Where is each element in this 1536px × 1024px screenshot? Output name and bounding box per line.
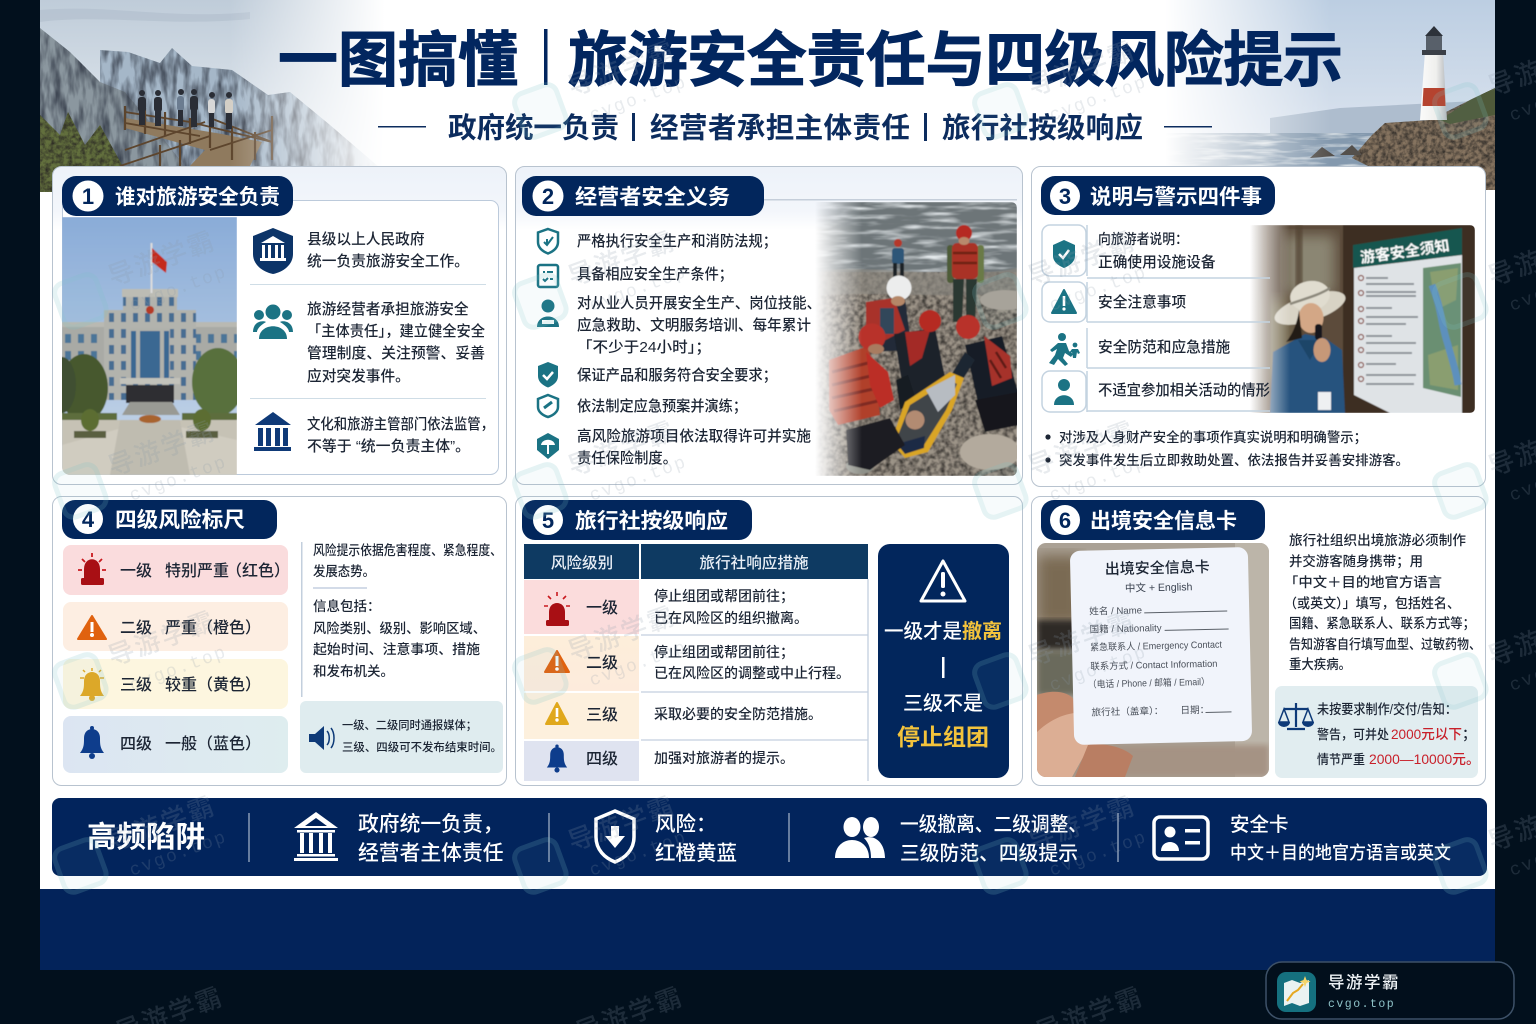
icon: operators group bbox=[253, 304, 293, 339]
panel 6 heading: 出境安全信息卡 bbox=[1090, 509, 1237, 533]
text: card requirements: 并交游客随身携带；用 bbox=[1289, 553, 1423, 570]
text: card requirements: 旅行社组织出境旅游必须制作 bbox=[1289, 532, 1467, 548]
rescuer standing bbox=[947, 225, 984, 322]
watermark layer: cvgo.top bbox=[1047, 73, 1150, 127]
icon: equipment shield bbox=[1053, 240, 1075, 268]
text: required conditions: 具备相应安全生产条件； bbox=[577, 265, 733, 283]
callout: penalty: 。 bbox=[1466, 751, 1480, 767]
icon: visitors on deck bbox=[138, 89, 233, 129]
watermark layer: 导游学霸 bbox=[564, 600, 680, 667]
text: notice contents: 风险类别、级别、影响区域、 bbox=[313, 620, 486, 636]
text: notice contents: 信息包括： bbox=[313, 598, 380, 614]
row: level three yellow bbox=[63, 659, 288, 709]
heading: frequent traps: 高频陷阱 bbox=[87, 821, 205, 854]
watermark layer: 导游学霸 bbox=[104, 415, 220, 482]
safety card: 联系方式 / Contact Information bbox=[1090, 658, 1218, 673]
text: operator duty: 「主体责任」，建立健全安全 bbox=[307, 322, 485, 340]
watermark layer: cvgo.top bbox=[587, 453, 690, 507]
callout: media notice: 一级、二级同时通报媒体； bbox=[342, 718, 477, 732]
callout: penalty: 2000—10000元 bbox=[1369, 751, 1466, 767]
watermark layer: cvgo.top bbox=[1047, 643, 1150, 697]
watermark layer: cvgo.top bbox=[127, 453, 230, 507]
callout: penalty: 2000元以下 bbox=[1391, 726, 1462, 742]
text: correct use of equipment: 向旅游者说明： bbox=[1098, 231, 1188, 247]
safety card: 旅行社（盖章）： bbox=[1091, 705, 1164, 719]
icon: trained staff bbox=[537, 300, 559, 327]
panel 4 heading: 4 bbox=[82, 507, 95, 532]
icon: person bbox=[1054, 379, 1074, 405]
table: response measures: 采取必要的安全防范措施。 bbox=[654, 706, 822, 722]
callout: penalty: 未按要求制作/交付/告知： bbox=[1317, 701, 1457, 717]
safety card: 紧急联系人 / Emergency Contact bbox=[1090, 639, 1222, 654]
watermark layer: 导游学霸 bbox=[1024, 35, 1140, 102]
icon: red alarm bbox=[544, 592, 570, 626]
text: correct use of equipment: 正确使用设施设备 bbox=[1098, 254, 1216, 271]
watermark layer: cvgo.top bbox=[1047, 453, 1150, 507]
row: level three yellow: 三级 bbox=[120, 676, 152, 694]
text: safety card language bbox=[1230, 814, 1451, 863]
text: high risk projects bbox=[577, 427, 811, 467]
text: notice contents: 起始时间、注意事项、措施 bbox=[313, 641, 481, 657]
icon: folded map logo bbox=[1277, 972, 1316, 1012]
text: bullet list: 对涉及人身财产安全的事项作真实说明和明确警示； bbox=[1059, 429, 1367, 446]
watermark layer: 导游学霸 bbox=[1024, 605, 1140, 672]
text: government and operators: 经营者主体责任 bbox=[358, 842, 504, 865]
text: bullet list: 突发事件发生后立即救助处置、依法报告并妥善安排游客。 bbox=[1059, 452, 1409, 468]
text: high risk projects: 高风险旅游项目依法取得许可并实施 bbox=[577, 427, 811, 445]
rescuer far bbox=[892, 239, 904, 277]
watermark layer: cvgo.top bbox=[587, 73, 690, 127]
callout: level one evacuation: 一级才是 bbox=[884, 620, 962, 643]
icon: holding hand bbox=[1037, 692, 1133, 777]
panel 5: agency response by level bbox=[516, 496, 1022, 786]
text: training requirement: 「不少于24小时」； bbox=[577, 339, 711, 356]
navy footer band bbox=[40, 889, 1495, 970]
icon: orange warning bbox=[545, 651, 569, 672]
safety card: 日期： bbox=[1180, 705, 1209, 717]
row: level four blue: （蓝色） bbox=[197, 735, 261, 753]
text: card requirements: 重大疾病。 bbox=[1289, 657, 1351, 672]
text: unsuitable conditions: 不适宜参加相关活动的情形 bbox=[1098, 381, 1270, 399]
watermark layer: 导游学霸 bbox=[104, 225, 220, 292]
table: response measures: 加强对旅游者的提示。 bbox=[654, 750, 794, 766]
brand badge: cvgo.top bbox=[1328, 998, 1395, 1011]
row: level one red: 一级 bbox=[120, 562, 152, 580]
stretcher with casualty bbox=[891, 372, 964, 458]
header subtitle: 经营者承担主体责任 bbox=[650, 112, 910, 144]
text: product safety: 保证产品和服务符合安全要求； bbox=[577, 366, 777, 384]
watermark layer: cvgo.top bbox=[587, 263, 690, 317]
panel 4 heading bbox=[62, 500, 277, 539]
panel 3 heading: 3 bbox=[1059, 184, 1071, 209]
row: level two orange: （橙色） bbox=[197, 619, 261, 637]
icon: shield with arrow bbox=[596, 811, 634, 862]
panel 2: operator obligations bbox=[516, 166, 1030, 484]
photo: guide explaining safety board bbox=[1245, 225, 1475, 413]
panel 3: four explanations and warnings bbox=[1032, 166, 1486, 486]
text: safety card language: 安全卡 bbox=[1230, 814, 1289, 836]
text: operator duty: 旅游经营者承担旅游安全 bbox=[307, 300, 469, 318]
watermark layer: 导游学霸 bbox=[104, 605, 220, 672]
photo: guide explaining safety board: 游客安全须知 bbox=[1359, 237, 1451, 267]
text: operator duty: 应对突发事件。 bbox=[307, 367, 410, 385]
text: card requirements: （或英文）」填写，包括姓名、 bbox=[1284, 595, 1460, 611]
panel 1 heading: 谁对旅游安全负责 bbox=[115, 185, 280, 209]
table: response measures bbox=[524, 544, 868, 781]
header subtitle: 政府统一负责 bbox=[448, 112, 619, 144]
safety card bbox=[1070, 547, 1252, 745]
text: correct use of equipment bbox=[1098, 231, 1216, 271]
text: regulator duty: 不等于 “统一负责主体”。 bbox=[307, 437, 470, 455]
icon: rocky cliff bbox=[1352, 88, 1495, 190]
panel 1 heading bbox=[62, 176, 293, 216]
icon: shield outline bbox=[538, 229, 558, 254]
watermark layer: 导游学霸 bbox=[1024, 225, 1140, 292]
header scene: lighthouse coast bbox=[1176, 0, 1495, 190]
row: level one red: （红色） bbox=[226, 562, 290, 580]
figure: guide with microphone bbox=[1270, 278, 1349, 413]
text: risk notice basis: 风险提示依据危害程度、紧急程度、 bbox=[313, 542, 502, 558]
text: level actions: 三级防范、四级提示 bbox=[900, 842, 1078, 865]
panel 6 heading: 6 bbox=[1059, 508, 1071, 533]
row: level one red: 特别严重 bbox=[165, 562, 229, 580]
text: risk notice basis: 发展态势。 bbox=[313, 563, 375, 579]
panel 4: four level risk scale bbox=[52, 496, 506, 786]
safety card: （电话 / Phone / 邮箱 / Email） bbox=[1088, 676, 1210, 691]
icon: wooden lookout deck bbox=[120, 106, 272, 166]
safety card: 出境安全信息卡 bbox=[1105, 558, 1210, 578]
callout: penalty: ； bbox=[1462, 726, 1476, 743]
panel 5 heading: 5 bbox=[542, 508, 554, 533]
watermark layer: cvgo.top bbox=[127, 643, 230, 697]
callout: level one evacuation bbox=[878, 544, 1009, 778]
header subtitle: 旅行社按级响应 bbox=[942, 112, 1143, 144]
text: training requirement: 应急救助、文明服务培训、每年累计 bbox=[577, 316, 811, 334]
bottom bar: frequent traps bbox=[52, 798, 1487, 876]
header scene: mountain lookout bbox=[40, 0, 374, 192]
text: regulator duty bbox=[307, 415, 494, 455]
row: level three yellow: 较重 bbox=[165, 676, 197, 694]
table: response measures: 风险级别 bbox=[551, 554, 613, 572]
panel 1: who is responsible bbox=[48, 166, 506, 484]
header title: 一图搞懂 bbox=[278, 27, 518, 94]
inner content box bbox=[62, 200, 498, 474]
watermark layer: cvgo.top bbox=[127, 828, 230, 882]
text: government and operators bbox=[358, 812, 504, 865]
safety card: 中文 + English bbox=[1125, 580, 1193, 595]
panel 2 heading bbox=[522, 176, 764, 216]
text: regulator duty: 文化和旅游主管部门依法监管， bbox=[307, 415, 494, 433]
text: emergency plan: 依法制定应急预案并演练； bbox=[577, 397, 747, 415]
text: safety card language: 中文＋目的地官方语言或英文 bbox=[1230, 843, 1451, 863]
icon: people bbox=[835, 817, 885, 858]
icon: blue bell bbox=[547, 745, 567, 773]
text: risk colours: 风险： bbox=[655, 813, 716, 836]
watermark layer: 导游学霸 bbox=[564, 790, 680, 857]
text: safety notes: 安全注意事项 bbox=[1098, 293, 1186, 311]
table: response measures: 一级 bbox=[586, 599, 618, 617]
text: government duty bbox=[307, 230, 469, 270]
callout: penalty: 情节严重 bbox=[1317, 752, 1365, 767]
panel 2 heading: 2 bbox=[542, 184, 554, 209]
text: card requirements: 「中文＋目的地官方语言 bbox=[1284, 574, 1442, 590]
watermark layer: cvgo.top bbox=[1047, 828, 1150, 882]
icon: regulator building bbox=[254, 412, 291, 451]
callout: penalty bbox=[1275, 686, 1480, 778]
icon: yellow warning bbox=[546, 703, 568, 724]
text: notice contents: 和发布机关。 bbox=[313, 663, 394, 679]
text: level actions: 一级撤离、二级调整、 bbox=[900, 813, 1087, 836]
icon: warning triangle bbox=[1052, 290, 1076, 313]
text: bullet list bbox=[1045, 429, 1409, 468]
text: level actions bbox=[900, 813, 1087, 865]
callout: penalty: 警告，可并处 bbox=[1317, 727, 1389, 742]
photo: hand holding safety card bbox=[1037, 543, 1269, 777]
brand badge: 导游学霸 bbox=[1328, 972, 1400, 992]
watermark layer: cvgo.top bbox=[587, 638, 690, 692]
safety card: 国籍 / Nationality bbox=[1089, 622, 1162, 636]
text: training requirement bbox=[577, 294, 821, 356]
callout: level one evacuation: 三级不是 bbox=[903, 692, 983, 715]
watermark layer: 导游学霸 bbox=[564, 35, 680, 102]
text: card requirements bbox=[1284, 532, 1481, 672]
watermark layer: 导游学霸 bbox=[564, 225, 680, 292]
text: risk colours: 红橙黄蓝 bbox=[655, 842, 737, 865]
rescuer left large bbox=[829, 324, 905, 470]
table: response measures: 已在风险区的组织撤离。 bbox=[654, 610, 808, 626]
table: response measures: 二级 bbox=[586, 654, 618, 672]
watermark layer: cvgo.top bbox=[1047, 263, 1150, 317]
panel 6 heading bbox=[1041, 500, 1265, 540]
row: level one red bbox=[63, 545, 290, 595]
header title: 旅游安全责任与四级风险提示 bbox=[568, 27, 1343, 94]
brand badge bbox=[1266, 962, 1514, 1019]
panel 3 heading: 说明与警示四件事 bbox=[1090, 185, 1262, 209]
callout: level one evacuation: 停止组团 bbox=[897, 724, 989, 750]
icon: id card bbox=[1154, 817, 1208, 859]
panel 5 heading bbox=[522, 500, 752, 540]
watermark layer: cvgo.top bbox=[587, 828, 690, 882]
table: response measures: 停止组团或帮团前往； bbox=[654, 644, 794, 661]
icon: shield with government building bbox=[253, 228, 293, 274]
callout: media notice bbox=[300, 701, 503, 773]
text: safety regulations: 严格执行安全生产和消防法规； bbox=[577, 232, 777, 250]
table: response measures: 已在风险区的调整或中止行程。 bbox=[654, 665, 850, 681]
icon: lighthouse bbox=[1420, 26, 1447, 120]
watermark layer: 导游学霸 bbox=[564, 415, 680, 482]
table: response measures: 三级 bbox=[586, 706, 618, 724]
text: government and operators: 政府统一负责， bbox=[358, 812, 504, 836]
photo: rescue team on rocky shore bbox=[810, 202, 1030, 476]
photo: government building bbox=[62, 217, 237, 475]
row: level four blue: 一般 bbox=[165, 735, 197, 753]
watermark layer: 导游学霸 bbox=[1024, 790, 1140, 857]
row: level two orange: 严重 bbox=[165, 619, 197, 637]
panel 6: outbound safety card bbox=[1032, 496, 1486, 786]
table: response measures: 停止组团或帮团前往； bbox=[654, 588, 794, 605]
panel 2 heading: 经营者安全义务 bbox=[575, 185, 730, 209]
watermark layer: 导游学霸 bbox=[104, 790, 220, 857]
text: operator duty: 管理制度、关注预警、妥善 bbox=[307, 344, 485, 362]
panel 4 heading: 四级风险标尺 bbox=[115, 508, 245, 532]
watermark layer: cvgo.top bbox=[127, 263, 230, 317]
row: level two orange bbox=[63, 602, 288, 651]
text: notice contents bbox=[313, 598, 486, 679]
callout: level one evacuation: 撤离 bbox=[962, 619, 1002, 643]
text: high risk projects: 责任保险制度。 bbox=[577, 449, 677, 467]
row: level four blue: 四级 bbox=[120, 735, 152, 753]
icon: shield check bbox=[538, 362, 558, 388]
icon: bank bbox=[294, 812, 338, 861]
panel 1 heading: 1 bbox=[82, 184, 94, 209]
icon: emergency plan bbox=[538, 395, 558, 417]
text: card requirements: 国籍、紧急联系人、联系方式等； bbox=[1289, 615, 1475, 632]
table: response measures: 旅行社响应措施 bbox=[699, 553, 809, 572]
icon: insurance umbrella bbox=[537, 433, 559, 459]
panel 5 heading: 旅行社按级响应 bbox=[575, 509, 728, 533]
rescuer white helmet bbox=[866, 276, 912, 352]
rescuer right kneeling bbox=[952, 314, 1017, 432]
text: training requirement: 对从业人员开展安全生产、岗位技能、 bbox=[577, 294, 821, 312]
row: level three yellow: （黄色） bbox=[197, 676, 261, 694]
panel 3 heading bbox=[1041, 176, 1275, 215]
row: level four blue bbox=[63, 716, 288, 773]
text: card requirements: 告知游客自行填写血型、过敏药物、 bbox=[1289, 636, 1481, 652]
callout: media notice: 三级、四级可不发布结束时间。 bbox=[342, 740, 502, 754]
safety card: 姓名 / Name bbox=[1089, 604, 1142, 618]
table: response measures: 四级 bbox=[586, 750, 618, 768]
text: operator duty bbox=[307, 300, 485, 385]
watermark layer: 导游学霸 bbox=[1024, 415, 1140, 482]
text: prevention measures: 安全防范和应急措施 bbox=[1098, 338, 1231, 356]
icon: checklist bbox=[538, 265, 558, 287]
text: risk colours bbox=[655, 813, 737, 865]
row: level two orange: 二级 bbox=[120, 619, 152, 637]
rescuer centre bbox=[894, 310, 948, 410]
text: government duty: 县级以上人民政府 bbox=[307, 230, 425, 248]
text: government duty: 统一负责旅游安全工作。 bbox=[307, 252, 469, 270]
icon: running person bbox=[1049, 333, 1080, 366]
text: risk notice basis bbox=[313, 542, 502, 579]
header subtitle bbox=[378, 112, 1212, 144]
